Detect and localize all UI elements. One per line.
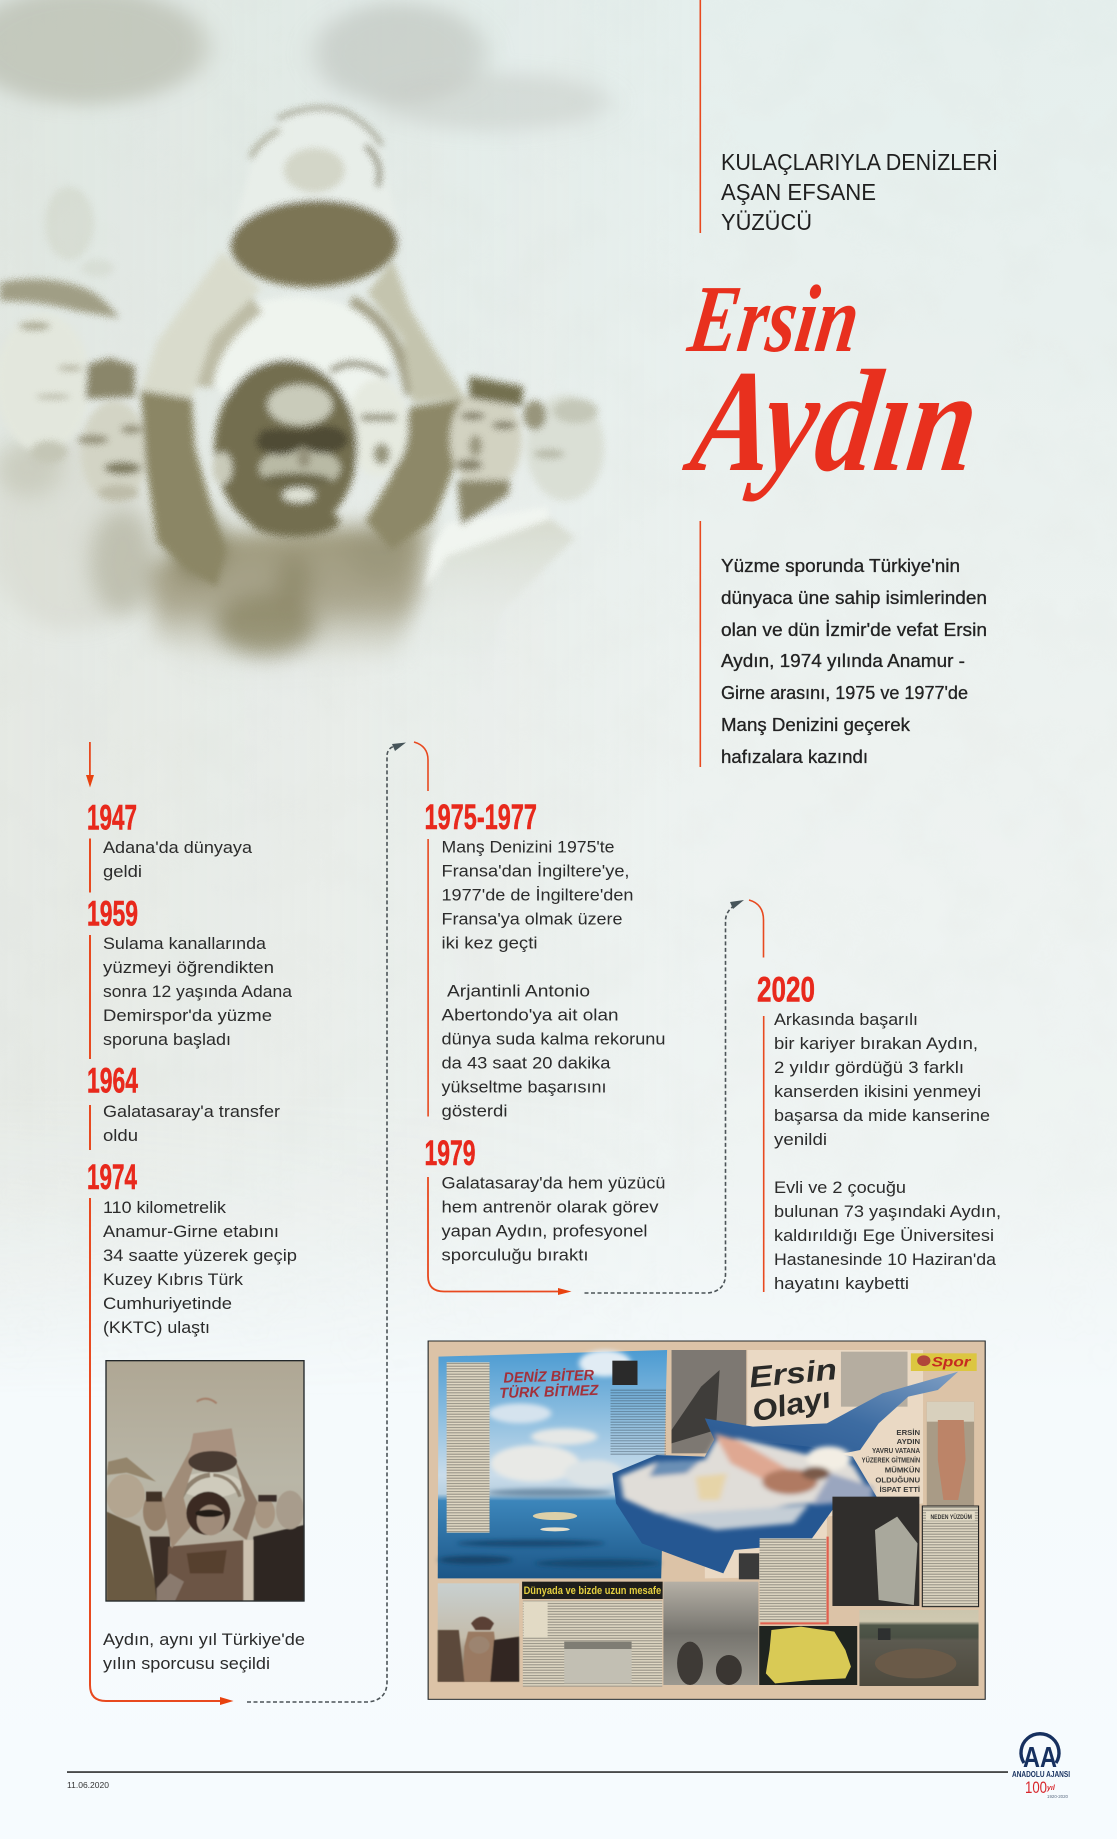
timeline entry: 1964: 1964 xyxy=(87,1062,138,1100)
second man xyxy=(86,358,135,399)
timeline entry: 2020: bulunan 73 yaşındaki Aydın, xyxy=(774,1202,1001,1221)
light paper under collage xyxy=(705,1350,923,1578)
heading: subtitle: YÜZÜCÜ xyxy=(721,209,812,235)
timeline entry: 1974 xyxy=(87,1158,297,1337)
timeline entry: 1979: 1979 xyxy=(424,1134,476,1173)
timeline entry: 1964 xyxy=(87,1062,280,1150)
side quote: YÜZEREK GİTMENİN xyxy=(862,1456,920,1465)
timeline entry: 1975-1977: 1975-1977 xyxy=(424,798,537,837)
head: hair and beard xyxy=(214,360,357,536)
laurel halo xyxy=(206,297,390,419)
intro text block: Aydın, 1974 yılında Anamur - xyxy=(721,650,965,671)
timeline entry: 1975-1977: dünya suda kalma rekorunu xyxy=(442,1030,666,1048)
Ersin Olayı title xyxy=(747,1353,839,1428)
timeline entry: 2020: hayatını kaybetti xyxy=(774,1274,909,1293)
timeline entry: 1975-1977: Arjantinli Antonio xyxy=(447,982,590,1000)
intro text block: Girne arasını, 1975 ve 1977'de xyxy=(721,682,968,703)
newspaper clipping: NEDEN YÜZDÜM xyxy=(930,1512,972,1521)
timeline entry: 1974: 1974 xyxy=(87,1158,137,1197)
Ersin Olayı title: Ersin xyxy=(747,1353,839,1394)
man behind xyxy=(347,378,408,476)
heading: subtitle: AŞAN EFSANE xyxy=(721,179,876,205)
timeline entry: 1959: yüzmeyi öğrendikten xyxy=(103,958,274,977)
timeline entry: 1947: geldi xyxy=(103,862,142,881)
timeline entry: 1964: Galatasaray'a transfer xyxy=(103,1102,280,1121)
arrow: red line column two xyxy=(428,1177,572,1295)
hero photo: swimmer lifting trophy xyxy=(0,100,608,673)
timeline entry: 1979: Galatasaray'da hem yüzücü xyxy=(442,1174,666,1192)
logo: Anadolu Ajansı 100th year: ANADOLU AJANSI xyxy=(1012,1770,1070,1779)
arrow: dashed connector to column two xyxy=(247,742,406,1702)
left officer xyxy=(0,313,90,452)
intro text block: olan ve dün İzmir'de vefat Ersin xyxy=(721,619,987,640)
caption: athlete of the year: yılın sporcusu seçildi xyxy=(103,1654,270,1673)
timeline entry: 1974: Anamur-Girne etabını xyxy=(103,1222,279,1241)
timeline entry: 2020 xyxy=(757,970,1001,1293)
heading: subtitle xyxy=(721,149,998,235)
timeline entry: 1959: 1959 xyxy=(87,894,138,934)
logo: Anadolu Ajansı 100th year: yıl xyxy=(1046,1785,1056,1792)
timeline entry: 1975-1977: Fransa'ya olmak üzere xyxy=(442,910,622,928)
timeline entry: 1974: Cumhuriyetinde xyxy=(103,1294,232,1313)
timeline entry: 1975-1977: iki kez geçti xyxy=(442,934,538,952)
timeline entry: 2020: 2 yıldır gördüğü 3 farklı xyxy=(774,1058,964,1077)
timeline entry: 1975-1977: da 43 saat 20 dakika xyxy=(442,1054,611,1072)
timeline entry: 2020: bir kariyer bırakan Aydın, xyxy=(774,1034,978,1053)
timeline entry: 1974: 110 kilometrelik xyxy=(103,1198,227,1217)
timeline entry: 1947 xyxy=(87,798,253,892)
timeline entry: 1975-1977: yükseltme başarısını xyxy=(442,1078,606,1096)
heading: subtitle: KULAÇLARIYLA DENİZLERİ xyxy=(721,149,998,175)
side quote: MÜMKÜN xyxy=(885,1466,920,1474)
timeline entry: 1979: hem antrenör olarak görev xyxy=(442,1198,659,1216)
newspaper clipping: Spor xyxy=(932,1355,972,1370)
timeline entry: 1974: Kuzey Kıbrıs Türk xyxy=(103,1270,244,1289)
timeline entry: 1959: Sulama kanallarında xyxy=(103,934,267,953)
mottled patch xyxy=(45,187,94,260)
intro text block: dünyaca üne sahip isimlerinden xyxy=(721,587,987,608)
Spor logo xyxy=(911,1353,977,1371)
timeline entry: 1959 xyxy=(87,894,293,1059)
side quote: OLDUĞUNU xyxy=(875,1476,920,1484)
side quote: İSPAT ETTİ xyxy=(879,1485,920,1494)
uniform of sailor xyxy=(412,517,576,680)
title: name in red script xyxy=(677,265,988,502)
intro text block: Manş Denizini geçerek xyxy=(721,714,911,735)
sea and sky photo xyxy=(438,1350,667,1578)
side quote: AYDIN xyxy=(897,1437,920,1446)
timeline entry: 1964: oldu xyxy=(103,1126,138,1145)
intro text block xyxy=(721,555,987,767)
timeline entry: 1947: Adana'da dünyaya xyxy=(103,838,253,857)
small photo: swimmer with trophy xyxy=(105,1360,305,1602)
timeline entry: 2020: kaldırıldığı Ege Üniversitesi xyxy=(774,1226,994,1245)
intro text block: Yüzme sporunda Türkiye'nin xyxy=(721,555,960,576)
arrow: red line column one xyxy=(90,1198,234,1705)
side quote: YAVRU VATANA xyxy=(872,1446,921,1455)
sailor xyxy=(450,387,522,492)
headline: DENİZ BİTER xyxy=(503,1367,595,1386)
logo: Anadolu Ajansı 100th year xyxy=(1012,1734,1070,1799)
timeline entry: 1974: 34 saatte yüzerek geçip xyxy=(103,1246,297,1265)
timeline entry: 2020: kanserden ikisini yenmeyi xyxy=(774,1082,981,1101)
newspaper clipping xyxy=(428,1340,986,1700)
Ersin Olayı title: Olayı xyxy=(749,1381,834,1428)
caption: athlete of the year xyxy=(103,1630,305,1673)
timeline entry: 1979: yapan Aydın, profesyonel xyxy=(442,1222,648,1240)
title: name in red script: Aydın xyxy=(677,340,988,502)
far right man xyxy=(527,395,604,501)
timeline entry: 2020: yenildi xyxy=(774,1130,827,1149)
timeline entry: 2020: Arkasında başarılı xyxy=(774,1010,918,1029)
title: name in red script: Ersin xyxy=(682,265,866,372)
arrow: red arc into column three xyxy=(749,900,764,958)
newspaper clipping: Dünyada ve bizde uzun mesafe xyxy=(524,1584,661,1597)
side quote xyxy=(862,1428,921,1494)
top vertical rule xyxy=(700,0,701,233)
timeline entry: 1975-1977: gösterdi xyxy=(442,1102,508,1120)
hero photo stains xyxy=(0,0,609,628)
timeline entry: 1975-1977: Abertondo'ya ait olan xyxy=(442,1006,618,1024)
lower left photo xyxy=(438,1583,519,1682)
headline xyxy=(499,1367,599,1402)
arms xyxy=(141,252,261,399)
timeline entry: 1959: sporuna başladı xyxy=(103,1030,231,1049)
timeline entry: 2020: 2020 xyxy=(757,970,815,1010)
timeline entry: 2020: Hastanesinde 10 Haziran'da xyxy=(774,1250,997,1269)
arrow: red arc into column two xyxy=(414,742,428,791)
timeline entry: 1975-1977 xyxy=(424,798,666,1120)
logo: Anadolu Ajansı 100th year: AA xyxy=(1023,1742,1057,1774)
logo: Anadolu Ajansı 100th year: 100 xyxy=(1025,1778,1047,1797)
timeline entry: 1979: sporculuğu bıraktı xyxy=(442,1246,588,1264)
trophy xyxy=(229,108,402,244)
intro text block: hafızalara kazındı xyxy=(721,746,868,767)
headline: TÜRK BİTMEZ xyxy=(499,1383,599,1402)
timeline entry: 1979 xyxy=(424,1134,666,1264)
faded torso xyxy=(0,440,429,672)
arrow: timeline start xyxy=(86,742,94,788)
timeline entry: 2020: başarsa da mide kanserine xyxy=(774,1106,990,1125)
Cyprus-shaped swimmer collage xyxy=(705,1372,958,1457)
timeline entry: 1975-1977: Manş Denizini 1975'te xyxy=(442,838,614,856)
timeline entry: 1975-1977: 1977'de de İngiltere'den xyxy=(442,886,634,904)
arrow: dashed connector to column three xyxy=(584,900,744,1293)
caption: athlete of the year: Aydın, aynı yıl Türkiye'de xyxy=(103,1630,305,1649)
timeline entry: 1947: 1947 xyxy=(87,798,137,838)
logo: Anadolu Ajansı 100th year: 1920-2020 xyxy=(1047,1794,1068,1799)
date: 11.06.2020 xyxy=(67,1780,109,1790)
yellow banner xyxy=(522,1582,663,1599)
timeline entry: 1974: (KKTC) ulaştı xyxy=(103,1318,210,1337)
timeline entry: 2020: Evli ve 2 çocuğu xyxy=(774,1178,906,1197)
timeline entry: 1959: Demirspor'da yüzme xyxy=(103,1006,272,1025)
timeline entry: 1975-1977: Fransa'dan İngiltere'ye, xyxy=(442,862,630,880)
intro rule xyxy=(700,521,701,767)
side quote: ERSİN xyxy=(896,1428,920,1437)
footer rule xyxy=(67,1771,1008,1773)
timeline entry: 1959: sonra 12 yaşında Adana xyxy=(103,982,293,1001)
